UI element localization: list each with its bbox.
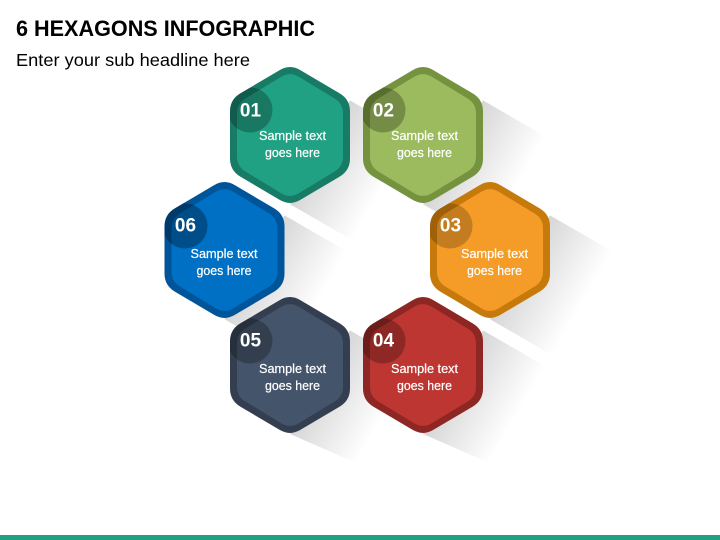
hexagon 06 [162, 182, 284, 318]
text 02 line 2: goes here [397, 146, 452, 160]
hexagon 01 fill [237, 74, 343, 196]
number 03: 03 [440, 216, 461, 236]
number badge 04 [360, 318, 406, 364]
hexagon 06 fill [172, 189, 278, 311]
shadow 04 [423, 330, 545, 462]
hexagon 05 border [230, 297, 350, 433]
hexagon 02 border [363, 67, 483, 203]
hexagon 05 [228, 297, 350, 433]
text 04 line 2: goes here [397, 379, 452, 393]
hexagon 06 border [164, 182, 284, 318]
number badge 03 [428, 204, 472, 248]
text 06 line 2: goes here [196, 264, 252, 278]
subtitle: Enter your sub headline here [16, 50, 250, 70]
title: 6 HEXAGONS INFOGRAPHIC [16, 16, 315, 41]
hexagon 04 border [363, 297, 483, 433]
bottom bar [0, 535, 720, 540]
text 02: Sample text [391, 129, 459, 143]
hexagon long shadows [224, 100, 612, 462]
number 06: 06 [175, 216, 196, 236]
text 05: Sample text [259, 362, 327, 376]
shadow 02 [423, 100, 545, 240]
shadow 01 [290, 100, 412, 240]
hexagon 03 fill [437, 189, 543, 311]
number 05: 05 [240, 330, 261, 352]
number badge 02 [360, 88, 406, 132]
number 01: 01 [240, 100, 261, 122]
hexagon 02 [360, 67, 483, 203]
hexagon 05 fill [237, 304, 343, 426]
number 04: 04 [373, 330, 394, 352]
number 02: 02 [373, 100, 394, 122]
number badge 01 [228, 88, 272, 132]
shadow 05 [290, 330, 412, 462]
number badge 05 [228, 318, 272, 364]
hexagon 04 fill [370, 304, 476, 426]
number badge 06 [162, 204, 208, 248]
text 06: Sample text [190, 247, 258, 261]
hexagon 03 [428, 182, 550, 318]
text 01 line 2: goes here [265, 146, 320, 160]
text 04: Sample text [391, 362, 459, 376]
hexagon 03 border [430, 182, 550, 318]
hexagon 04 [360, 297, 483, 433]
hexagon 01 [228, 67, 350, 203]
text 01: Sample text [259, 129, 327, 143]
shadow 03 [490, 215, 612, 355]
text 05 line 2: goes here [265, 379, 320, 393]
shadow 06 [224, 215, 347, 355]
hexagon 01 border [230, 67, 350, 203]
text 03 line 2: goes here [467, 264, 522, 278]
hexagon 02 fill [370, 74, 476, 196]
text 03: Sample text [461, 247, 529, 261]
